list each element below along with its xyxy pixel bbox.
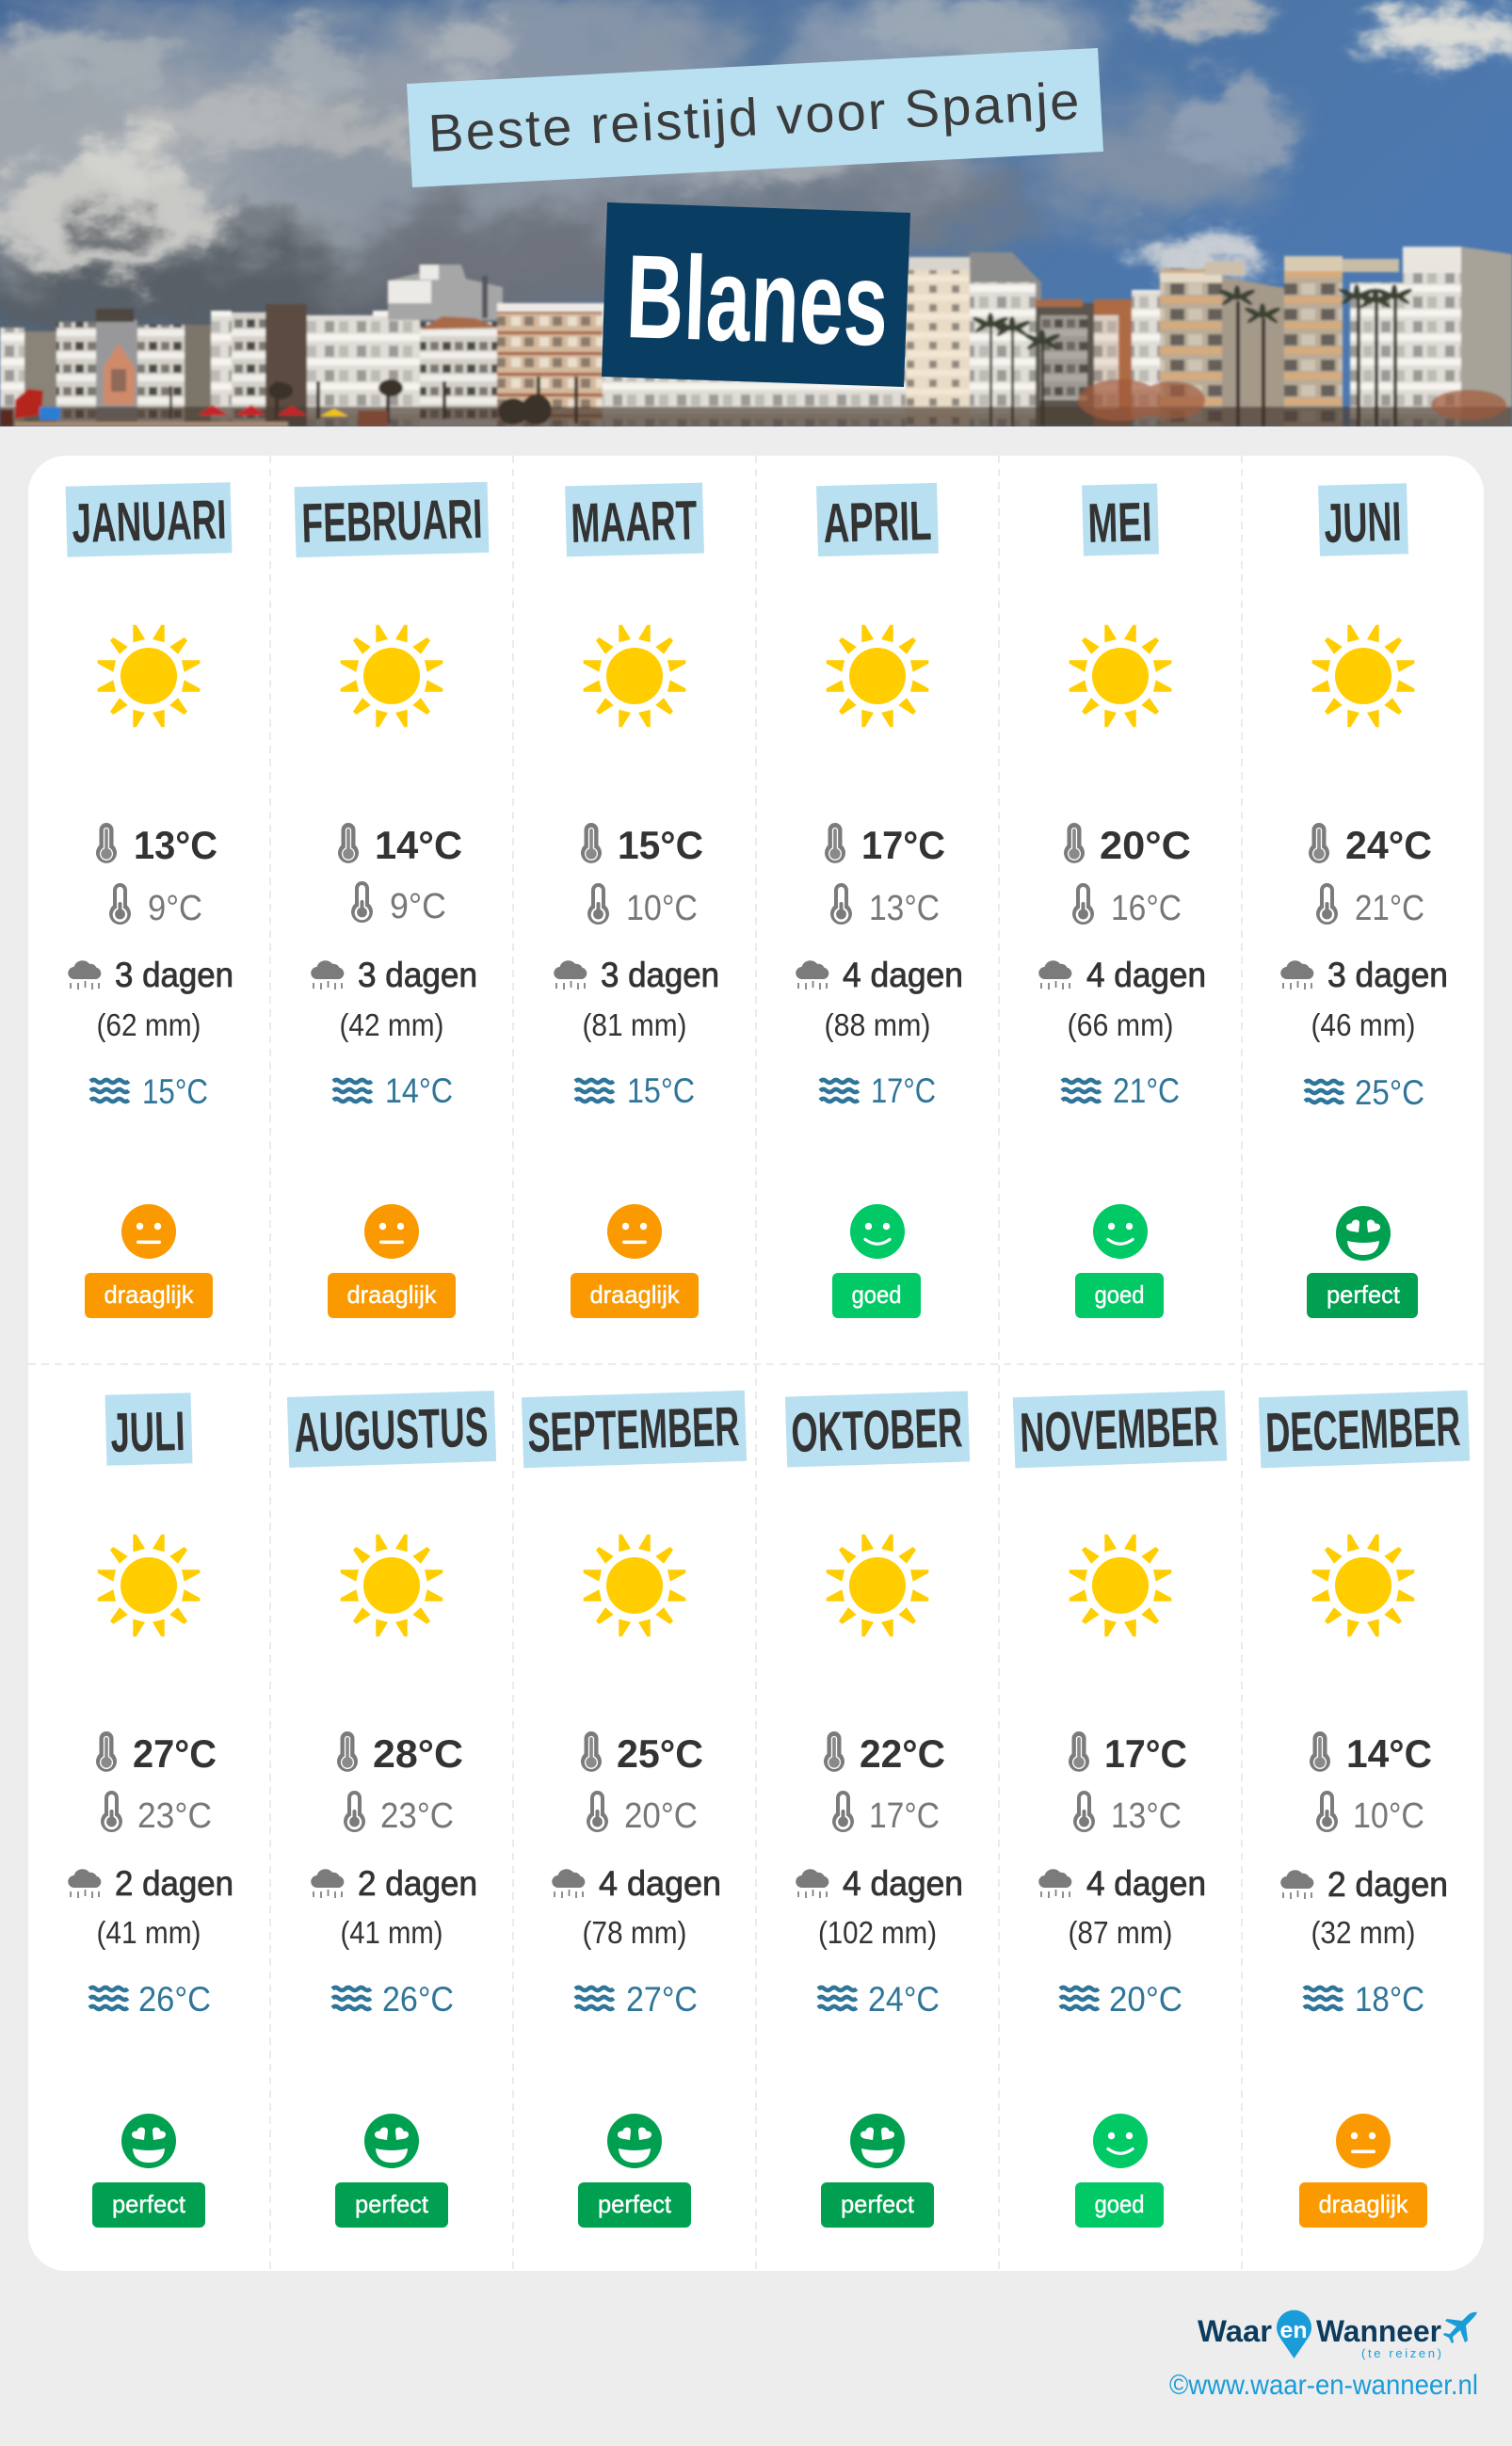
month: april: APRIL <box>823 490 932 555</box>
month: juni: (46 mm) <box>1311 1007 1416 1042</box>
month: september <box>522 1391 747 2228</box>
month: december: (32 mm) <box>1311 1915 1416 1950</box>
month: mei: 20°C <box>1100 823 1191 867</box>
month: november: 17°C <box>1104 1731 1187 1776</box>
month: februari: (42 mm) <box>339 1007 444 1042</box>
month: december <box>1259 1391 1470 2228</box>
trees and beach strip <box>0 407 1512 426</box>
month: februari <box>295 482 489 1318</box>
month: september: SEPTEMBER <box>526 1395 740 1464</box>
month: maart: MAART <box>571 490 698 555</box>
month: augustus: 23°C <box>380 1796 454 1836</box>
month: juni: 3 dagen <box>1327 956 1448 994</box>
month: november: 4 dagen <box>1086 1864 1206 1903</box>
month: maart <box>554 483 719 1318</box>
month: oktober: 4 dagen <box>843 1864 963 1903</box>
month: oktober: 22°C <box>860 1731 945 1776</box>
month: september: 4 dagen <box>599 1864 721 1903</box>
month: oktober <box>785 1391 970 2228</box>
month: augustus <box>287 1391 496 2228</box>
month: augustus: perfect <box>355 2190 429 2218</box>
month: februari: 9°C <box>390 887 446 926</box>
month: januari <box>66 482 233 1318</box>
website url: ©www.waar-en-wanneer.nl <box>1169 2370 1478 2401</box>
month: augustus: 2 dagen <box>358 1864 477 1903</box>
month: februari: draaglijk <box>346 1280 437 1309</box>
month: mei <box>1038 483 1206 1318</box>
month: maart: 15°C <box>618 823 703 867</box>
title banner: Beste reistijd voor Spanje <box>407 48 1103 187</box>
month: juli: (41 mm) <box>96 1915 201 1950</box>
month: juni: JUNI <box>1324 491 1402 555</box>
month: april <box>796 483 963 1318</box>
month: juli: 2 dagen <box>115 1864 233 1903</box>
month: november: 20°C <box>1109 1980 1182 2019</box>
month: maart: draaglijk <box>589 1280 680 1309</box>
month: april: (88 mm) <box>825 1007 930 1042</box>
month: april: goed <box>851 1280 902 1309</box>
month: februari: FEBRUARI <box>301 488 483 555</box>
month: augustus: AUGUSTUS <box>293 1396 489 1464</box>
month: september: 27°C <box>626 1980 698 2019</box>
month: november: 13°C <box>1111 1796 1182 1836</box>
title banner: Beste reistijd voor Spanje: Beste reistijd voor Spanje <box>426 71 1081 163</box>
month: maart: (81 mm) <box>582 1007 687 1042</box>
logo: Waar en Wanneer (te reizen) <box>1198 2310 1477 2360</box>
month: maart: 15°C <box>627 1071 695 1110</box>
month: mei: 4 dagen <box>1086 956 1206 994</box>
panel: monthly weather card <box>28 456 1484 2271</box>
month: augustus: (41 mm) <box>341 1915 442 1950</box>
month: maart: 3 dagen <box>601 956 719 994</box>
logo: Waar en Wanneer (te reizen): Waar <box>1198 2314 1272 2348</box>
month: november: NOVEMBER <box>1019 1395 1219 1464</box>
month: december: 18°C <box>1355 1980 1424 2019</box>
month: november: goed <box>1094 2190 1145 2218</box>
month: december: draaglijk <box>1318 2190 1408 2218</box>
month: april: 4 dagen <box>843 956 963 994</box>
month: mei: 21°C <box>1113 1071 1180 1110</box>
month: januari: 3 dagen <box>115 956 233 994</box>
month: juli: JULI <box>110 1400 185 1464</box>
month: oktober: (102 mm) <box>818 1915 937 1950</box>
city banner: Blanes: Blanes <box>624 230 890 371</box>
month: september: 25°C <box>617 1731 703 1776</box>
month: juni: perfect <box>1327 1280 1401 1309</box>
month: september: 20°C <box>624 1796 698 1836</box>
month: november <box>1013 1391 1227 2228</box>
left buildings <box>0 328 24 426</box>
month: juli: 27°C <box>133 1731 217 1776</box>
month: december: 2 dagen <box>1327 1865 1448 1904</box>
month: januari: draaglijk <box>104 1280 194 1309</box>
month: juni <box>1280 483 1448 1318</box>
month: juli: 23°C <box>137 1796 212 1836</box>
city banner: Blanes <box>602 202 910 387</box>
month: oktober: 17°C <box>869 1796 940 1836</box>
month: april: 17°C <box>861 823 945 867</box>
month: januari: 13°C <box>134 823 217 867</box>
month: januari: 15°C <box>142 1072 208 1111</box>
logo: Waar en Wanneer (te reizen): en <box>1280 2318 1307 2343</box>
month: mei: (66 mm) <box>1068 1007 1173 1042</box>
month: augustus: 28°C <box>373 1731 463 1776</box>
month: oktober: 24°C <box>868 1980 940 2019</box>
month: mei: goed <box>1094 1280 1145 1309</box>
month: juli: perfect <box>112 2190 186 2218</box>
month: juli <box>68 1392 233 2228</box>
right buildings <box>906 266 970 426</box>
month: juni: 21°C <box>1355 889 1424 928</box>
month: juni: 25°C <box>1355 1073 1424 1112</box>
month: januari: (62 mm) <box>96 1007 201 1042</box>
month: februari: 14°C <box>385 1071 453 1110</box>
month: maart: 10°C <box>626 889 698 928</box>
month: september: (78 mm) <box>582 1915 687 1950</box>
month: oktober: OKTOBER <box>790 1396 963 1464</box>
month: februari: 14°C <box>375 823 462 867</box>
month: april: 17°C <box>871 1071 936 1110</box>
month: juni: 24°C <box>1345 823 1432 867</box>
header photo: cloudy sky above beachfront apartment buildings <box>0 0 1512 426</box>
month: november: (87 mm) <box>1068 1915 1173 1950</box>
centre strip under the title box <box>603 311 909 426</box>
month: mei: 16°C <box>1111 889 1182 928</box>
month: april: 13°C <box>869 889 940 928</box>
logo: Waar en Wanneer (te reizen): Wanneer <box>1316 2314 1441 2348</box>
month: december: 14°C <box>1346 1731 1432 1776</box>
month: augustus: 26°C <box>382 1980 454 2019</box>
month: januari: 9°C <box>148 889 202 928</box>
month: mei: MEI <box>1087 491 1152 555</box>
month: februari: 3 dagen <box>358 956 477 994</box>
month: juli: 26°C <box>138 1980 211 2019</box>
month: september: perfect <box>598 2190 672 2218</box>
logo: Waar en Wanneer (te reizen): (te reizen) <box>1361 2346 1441 2360</box>
month: oktober: perfect <box>841 2190 915 2218</box>
month: december: 10°C <box>1353 1796 1424 1836</box>
month: januari: JANUARI <box>72 489 227 555</box>
